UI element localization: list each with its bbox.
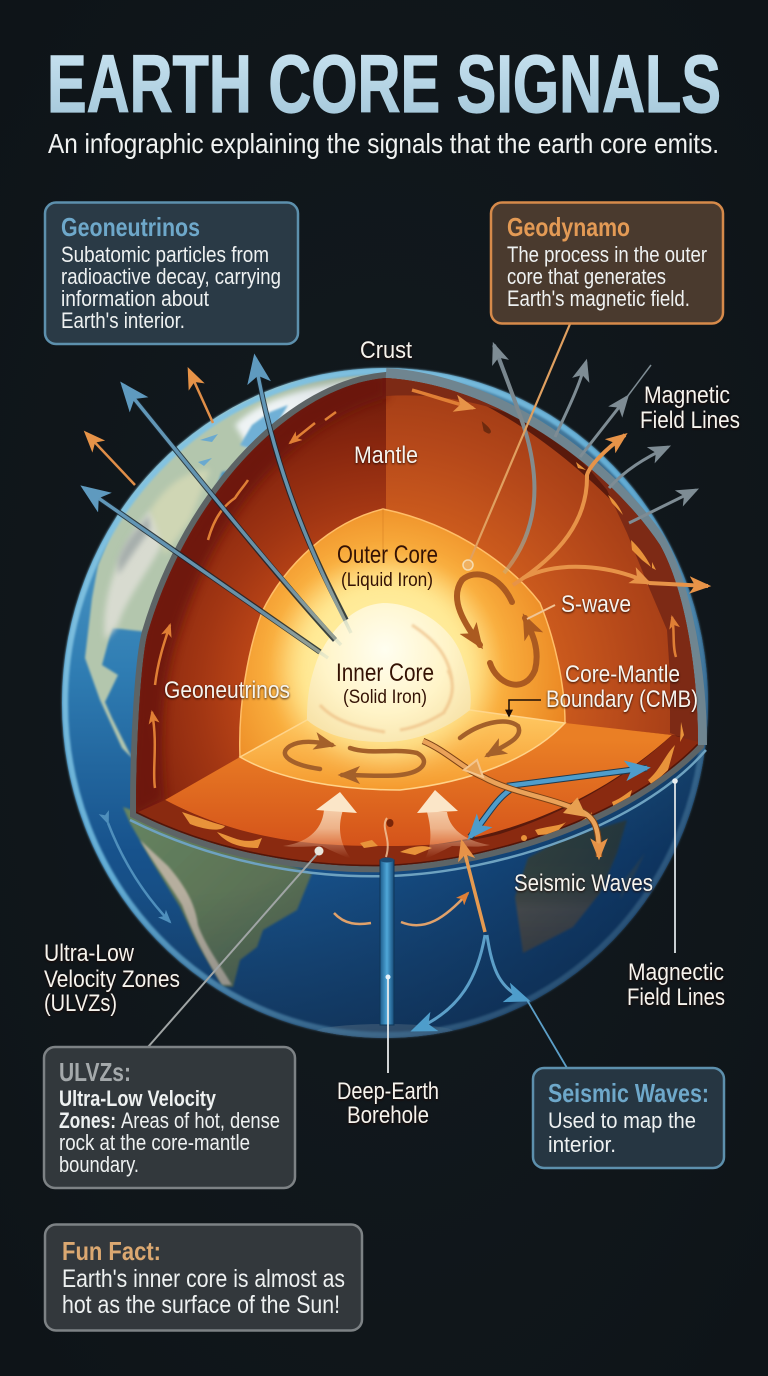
label: s-wave with leader [527,591,631,619]
label: outer core [337,541,438,591]
ocean flow marks [334,893,468,925]
crust shell edge [136,378,698,866]
outer core wall [240,509,565,757]
dark inner strip right [386,376,702,745]
label: ultra-low velocity zones: Ultra-Low [44,940,135,967]
geodynamo info box: Geodynamo [507,212,630,242]
mantle left wall [130,375,386,820]
inner core [307,603,471,742]
earth globe cutaway diagram [62,368,720,1040]
small eruption wisp [385,818,394,857]
rising heat plumes [283,790,490,860]
icon: deep-earth borehole [380,858,394,1025]
ULVZ info box: boundary. [59,1152,139,1177]
mantle right wall [386,375,710,740]
magnetic field line arrows [494,345,696,573]
geodynamo info box [491,202,723,324]
cutaway interior layers [136,378,698,866]
geoneutrinos info box: information about [61,286,209,311]
seismic waves leader line [527,1000,567,1068]
fun fact box [45,1224,362,1330]
geoneutrinos info box [45,202,298,344]
mantle floor [165,723,672,846]
ULVZ leader line [148,846,324,1047]
label: inner core: (Solid Iron) [343,687,427,708]
geodynamo leader line [463,324,570,570]
fun fact box: Earth's inner core is almost as [62,1265,345,1293]
label: ultra-low velocity zones: (ULVZs) [44,990,117,1017]
convection arrows: outer core [457,574,537,685]
label: seismic waves: Seismic Waves [514,870,653,897]
seismic wave arrows in the floor [423,741,647,857]
geoneutrinos info box: Subatomic particles from [61,242,269,267]
lava patches [182,462,684,855]
dark inner strip left [131,372,386,818]
label: magnetic field lines bottom with leader: Magnectic [628,959,724,986]
label: deep-earth borehole with leader: Deep-Earth [337,1078,439,1105]
geoneutrinos info box: Earth's interior. [61,308,185,333]
geoneutrinos info box: Geoneutrinos [61,212,200,242]
label: s-wave with leader: S-wave [561,591,631,618]
north america land [85,372,386,758]
label: magnetic field lines top: Field Lines [640,407,740,434]
label: magnetic field lines bottom with leader: Field Lines [627,984,725,1011]
label: inner core: Inner Core [336,659,434,687]
label: magnetic field lines top [640,382,740,434]
africa [515,820,627,953]
label: mantle: Mantle [354,442,418,469]
seismic waves info box: Seismic Waves: [548,1078,709,1108]
label: core-mantle boundary with leader: Boundary (CMB) [546,686,698,713]
label: outer core: Outer Core [337,541,438,569]
glow [291,570,481,760]
lower mantle band [136,735,702,866]
outer core floor [240,700,565,790]
fun fact box: hot as the surface of the Sun! [62,1291,340,1319]
ULVZ info box: rock at the core-mantle [59,1130,250,1155]
label: crust: Crust [360,337,412,364]
fun fact box: Fun Fact: [62,1236,161,1266]
label: outer core: (Liquid Iron) [341,570,433,591]
ULVZ info box: Ultra-Low Velocity [59,1086,217,1111]
label: core-mantle boundary with leader: Core-Mantle [565,661,680,688]
label: magnetic field lines top: Magnetic [644,382,730,409]
ULVZ info box: Areas of hot, dense [121,1108,280,1133]
ULVZ info box: Zones: [59,1108,116,1133]
geoneutrinos info box: radioactive decay, carrying [61,264,281,289]
geodynamo info box: core that generates [507,264,666,289]
label: deep-earth borehole with leader: Borehole [347,1102,429,1129]
geoneutrino arrows [84,358,351,658]
label: core-mantle boundary with leader [509,661,698,716]
south america [123,807,312,987]
label: ultra-low velocity zones: Velocity Zones [44,966,180,993]
mantle flow marks [152,390,676,788]
geodynamo and s-wave orange arrows [513,435,708,586]
globe sphere with continents [62,368,708,1040]
ULVZ info box [44,1047,295,1188]
seismic waves info box [533,1068,724,1168]
geodynamo info box: The process in the outer [507,242,707,267]
label: geoneutrinos: Geoneutrinos [164,677,290,704]
label: inner core [336,659,434,708]
label: ultra-low velocity zones [44,940,180,1017]
label: deep-earth borehole with leader [337,974,439,1129]
seismic waves info box: interior. [548,1132,616,1157]
label: magnetic field lines bottom with leader [627,778,725,1011]
seismic waves info box: Used to map the [548,1108,696,1133]
geodynamo info box: Earth's magnetic field. [507,286,690,311]
seismic ray branches [414,842,527,1030]
convection arrows: floor [285,722,519,776]
ULVZ info box: ULVZs: [59,1057,131,1087]
